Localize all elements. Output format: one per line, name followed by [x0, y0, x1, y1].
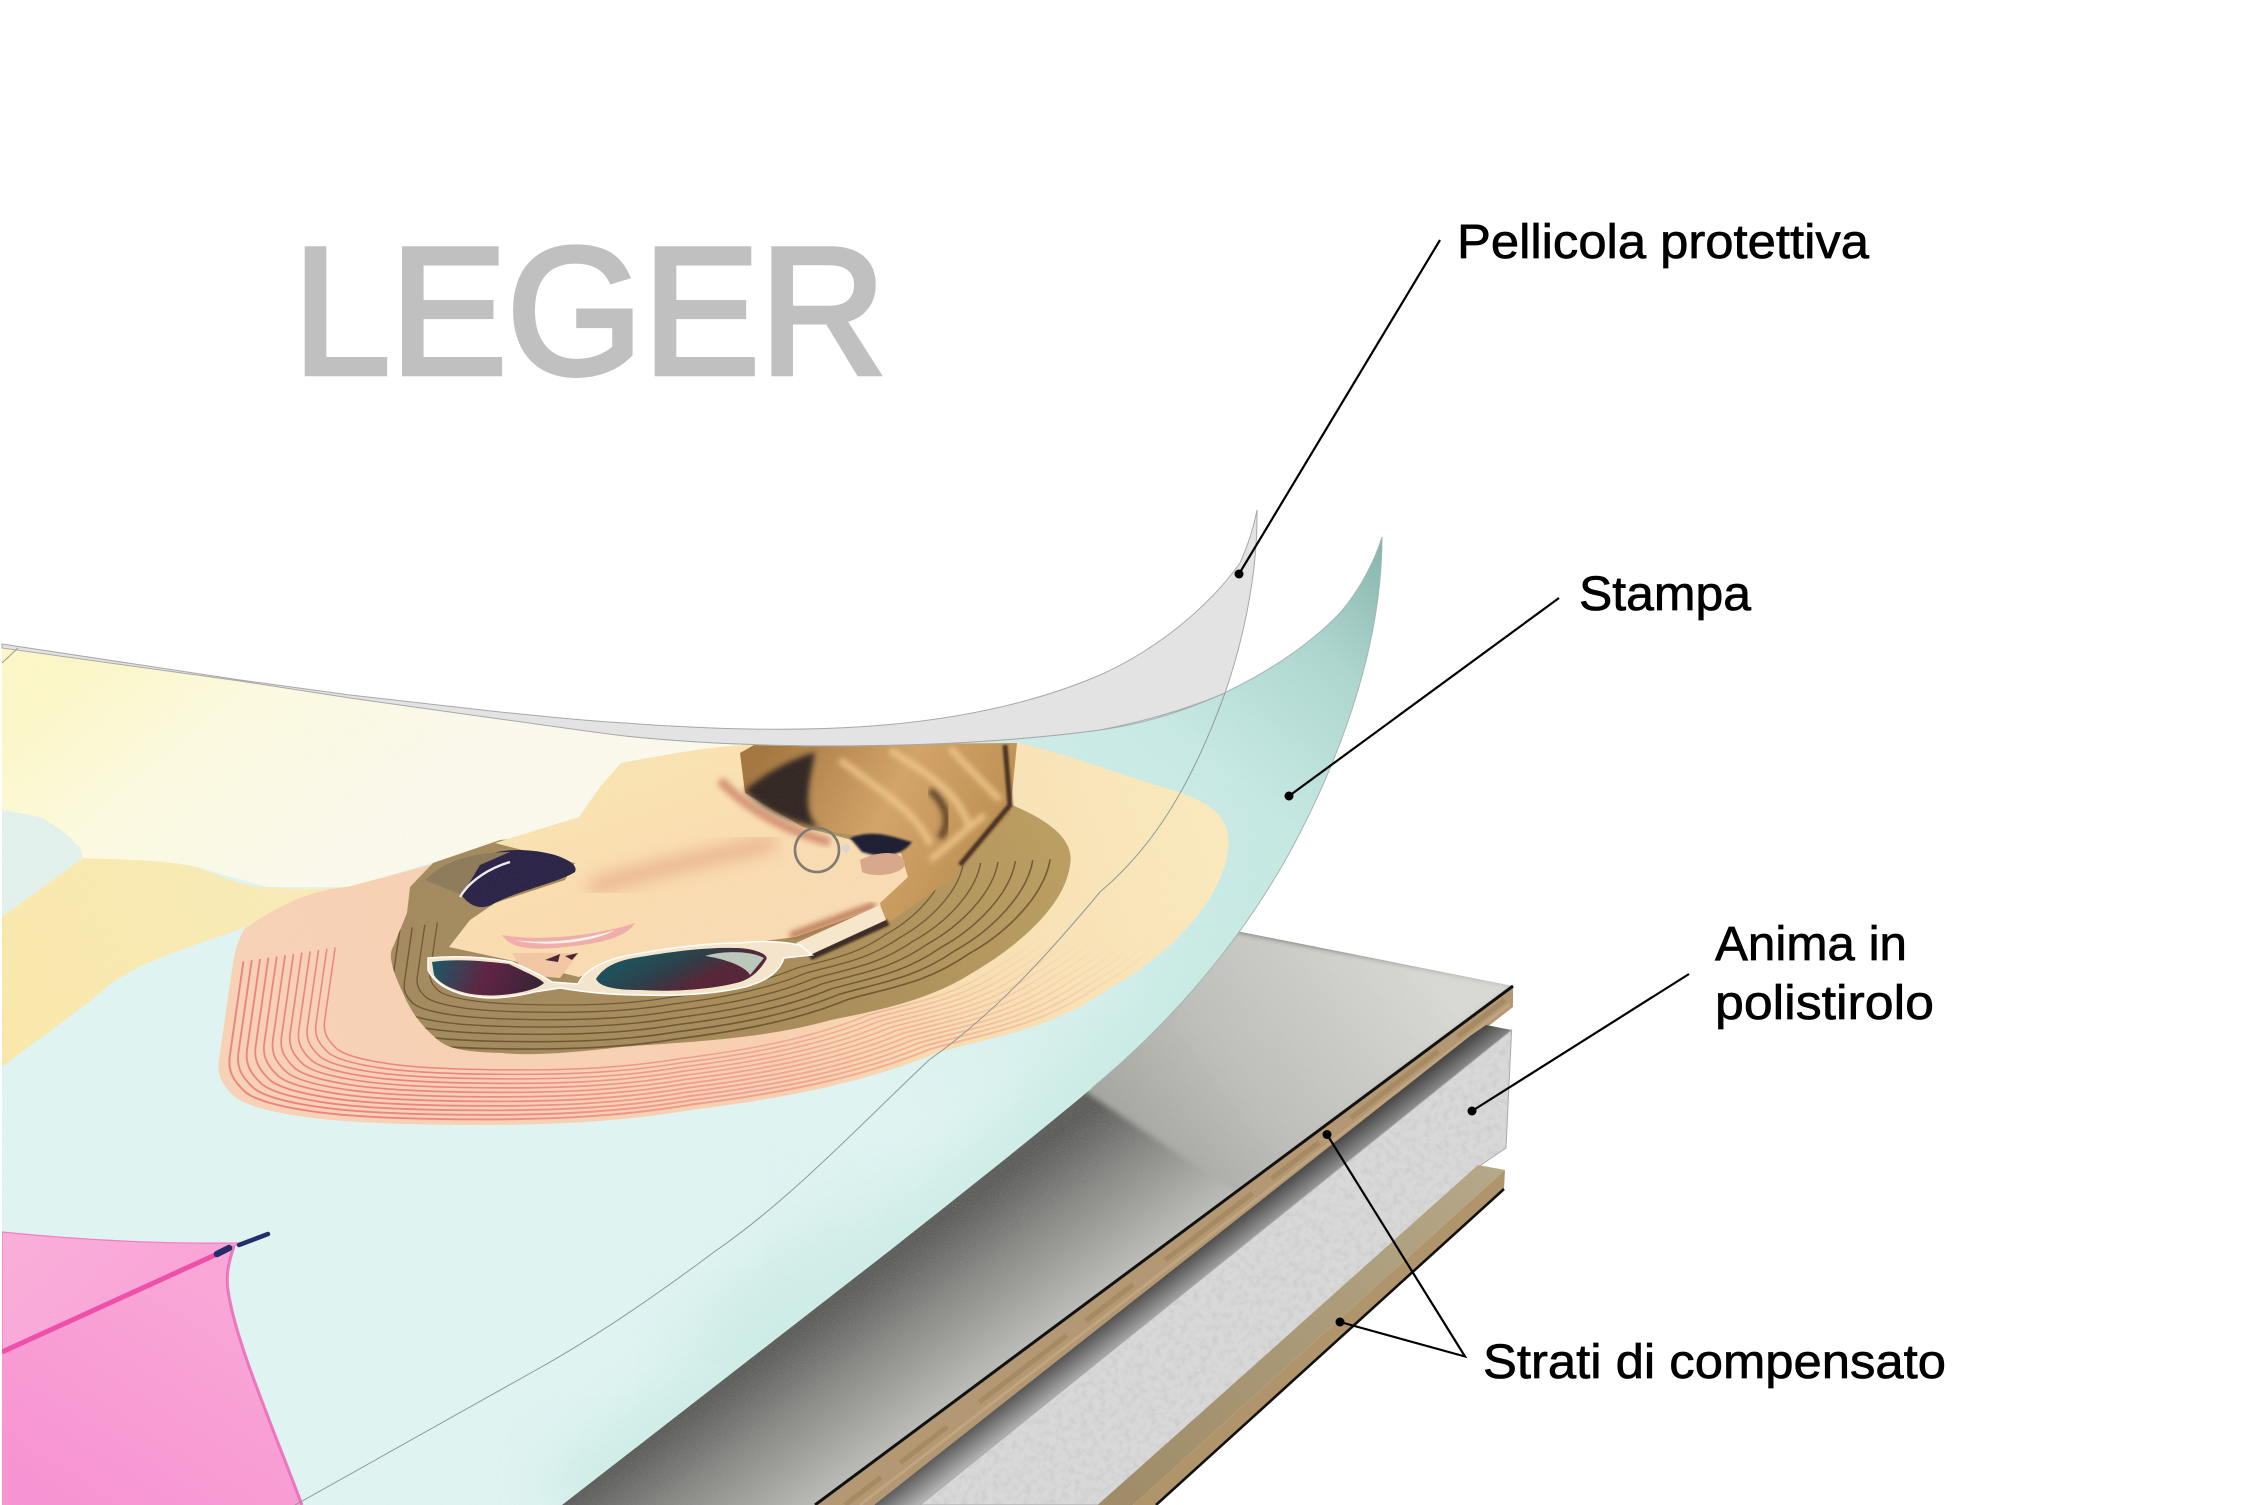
umbrella rib: [2, 1255, 215, 1352]
polystyrene core side: [900, 1020, 1520, 1505]
lower plywood layer: [1098, 1165, 1505, 1505]
print sheet: [0, 520, 1400, 1505]
pink umbrella: [2, 1232, 302, 1505]
dark hair behind forehead: [425, 850, 576, 907]
callout: Anima in polistirolo: Anima in: [1715, 917, 1907, 971]
callout: Strati di compensato: [1322, 1130, 1946, 1389]
blue patch left: [41, 818, 76, 844]
ear and earring: [795, 828, 905, 875]
film edge hairline: [295, 693, 1225, 1505]
callout: Strati di compensato: Strati di compensato: [1483, 1335, 1946, 1389]
pale sky area: [0, 640, 760, 887]
callout: Pellicola protettiva: [1234, 215, 1869, 578]
board top surface: [562, 932, 1511, 1505]
hat brim: [219, 743, 1229, 1125]
protective film: [2, 510, 1257, 1505]
upper plywood edge: [815, 986, 1513, 1505]
title: LEGER: [293, 210, 886, 412]
arm: [2, 858, 346, 1067]
hair: [740, 743, 1017, 925]
nose: [512, 953, 579, 978]
polystyrene core shadowed top: [874, 1025, 1512, 1505]
plywood and polystyrene panel: [562, 932, 1514, 1505]
teal background of print: [0, 520, 1400, 1505]
callout: Stampa: Stampa: [1579, 567, 1751, 621]
lips: [502, 923, 635, 949]
face and neck: [449, 745, 908, 977]
sunglasses: [428, 905, 888, 998]
callout: Pellicola protettiva: Pellicola protettiva: [1457, 215, 1869, 269]
print grain: [214, 750, 1010, 1256]
callout: Anima in polistirolo: [1468, 917, 1934, 1116]
umbrella ferrule: [217, 1234, 268, 1254]
callout: Stampa: [1284, 567, 1751, 800]
hat crown: [352, 800, 1071, 1054]
callout: Anima in polistirolo: polistirolo: [1715, 976, 1934, 1030]
